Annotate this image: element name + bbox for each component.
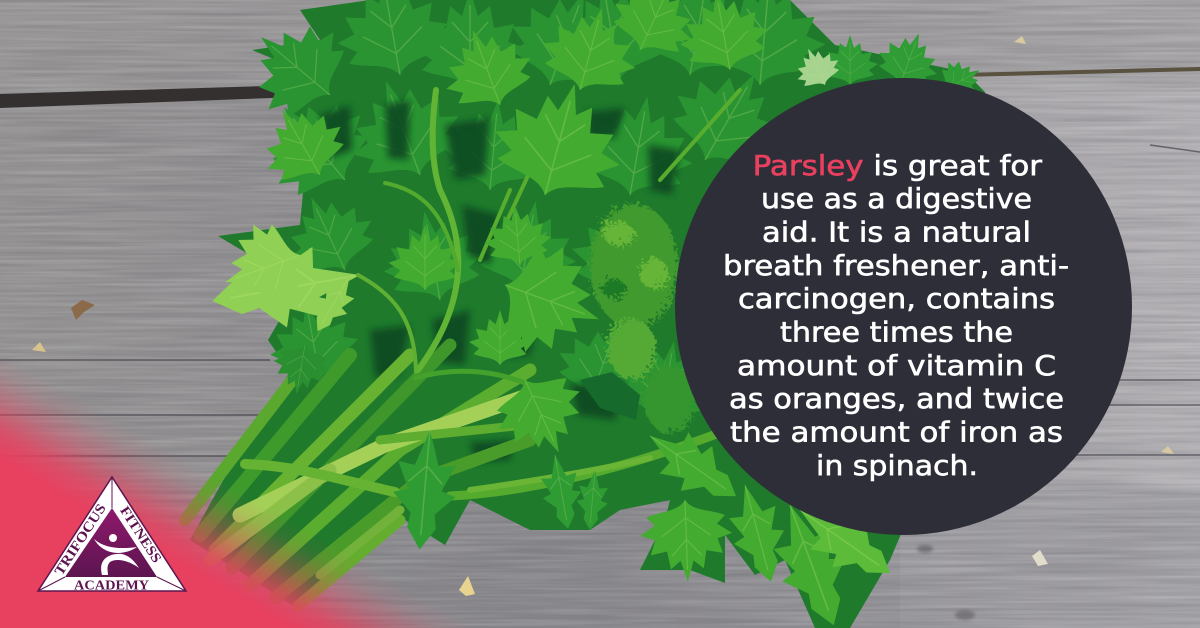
dark text circle	[675, 78, 1132, 535]
pink gradient corner	[0, 340, 500, 628]
parsley bunch	[185, 0, 1000, 628]
circle body text: three times the	[780, 316, 1013, 348]
circle body text: use as a digestive	[761, 183, 1032, 215]
circle body text: breath freshener, anti-	[723, 250, 1069, 282]
circle body text: amount of vitamin C	[737, 350, 1056, 382]
circle body text: the amount of iron as	[730, 416, 1063, 448]
pale leaves	[206, 39, 845, 340]
circle body text	[723, 150, 1069, 482]
back leaves	[229, 0, 831, 428]
bright leaves	[246, 0, 991, 628]
circle body text: Parsley is great for	[753, 150, 1043, 182]
logo triangle	[38, 477, 186, 591]
circle body text: in spinach.	[816, 450, 978, 482]
circle body text: as oranges, and twice	[729, 383, 1064, 415]
logo text: FITNESS	[116, 504, 164, 566]
dark gaps	[320, 100, 680, 462]
circle body text: carcinogen, contains	[738, 283, 1055, 315]
logo text: TRIFOCUS	[52, 501, 110, 579]
logo text	[52, 501, 164, 594]
dark leaf under circle	[580, 372, 640, 420]
foliage mass	[190, 0, 1000, 628]
logo inner triangle	[65, 508, 157, 577]
stems	[185, 90, 740, 606]
curly parsley	[586, 200, 691, 429]
logo figure	[94, 534, 139, 575]
circle body text: aid. It is a natural	[762, 216, 1031, 248]
Trifocus Fitness Academy logo	[38, 477, 186, 594]
logo text: ACADEMY	[74, 578, 149, 594]
main stems	[358, 90, 458, 372]
